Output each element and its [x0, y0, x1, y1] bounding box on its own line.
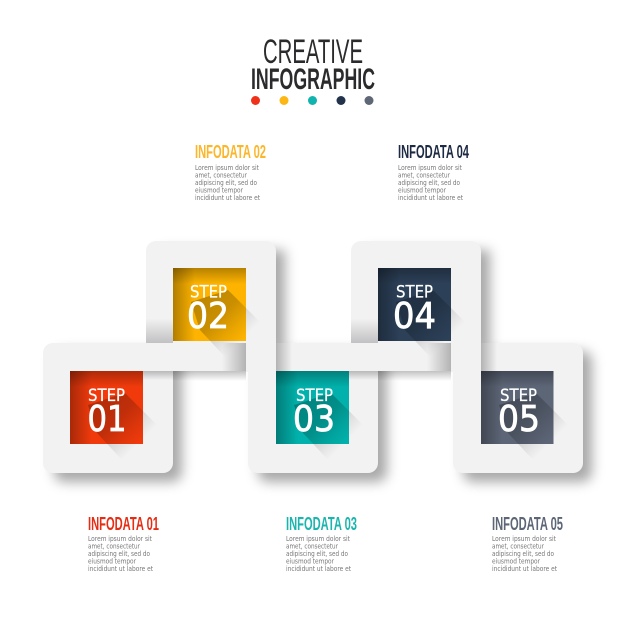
infodata 03 text block	[286, 514, 357, 573]
infodata 05 text block: adipiscing elit, sed do	[492, 550, 554, 558]
infodata 02 text block: adipiscing elit, sed do	[195, 179, 257, 187]
connector bar 1 to 2	[60, 343, 246, 371]
title: INFOGRAPHIC	[251, 63, 375, 96]
infodata 01 text block: adipiscing elit, sed do	[88, 550, 150, 558]
frame: step 05	[453, 343, 583, 473]
infodata 04 text block: eiusmod tempor	[398, 186, 446, 194]
title	[251, 33, 375, 96]
infodata 02 text block: Lorem ipsum dolor sit	[195, 164, 259, 172]
title: CREATIVE	[263, 33, 363, 71]
frame: step 03	[248, 343, 378, 473]
step 01	[70, 371, 158, 462]
infodata 04 text block: INFODATA 04	[398, 142, 469, 162]
infodata 04 text block: adipiscing elit, sed do	[398, 179, 460, 187]
vertical arm 4 to 5	[451, 300, 481, 372]
infodata 02 text block	[195, 142, 266, 202]
infodata 05 text block: INFODATA 05	[492, 514, 563, 534]
infodata 01 text block: incididunt ut labore et	[88, 565, 153, 573]
step 04: STEP	[396, 282, 433, 302]
step 05: STEP	[500, 386, 537, 406]
infodata 04 text block	[398, 142, 469, 202]
infodata 05 text block: incididunt ut labore et	[492, 565, 557, 573]
infodata 03 text block: incididunt ut labore et	[286, 565, 351, 573]
fold shading above bars	[146, 318, 378, 343]
frame: step 04 top	[351, 241, 481, 351]
step 01: STEP	[88, 386, 125, 406]
vertical arm 2 to 3	[246, 300, 276, 372]
step 03: 03	[293, 399, 335, 440]
step 01: 01	[88, 399, 126, 440]
connector bar 4 to 5	[481, 343, 497, 371]
infodata 05 text block: eiusmod tempor	[492, 558, 540, 566]
infodata 04 text block: Lorem ipsum dolor sit	[398, 164, 462, 172]
frame: step 01	[43, 343, 173, 473]
infodata 01 text block: INFODATA 01	[88, 514, 159, 534]
step 04	[378, 268, 466, 359]
infodata 02 text block: INFODATA 02	[195, 142, 266, 162]
infodata 02 text block: incididunt ut labore et	[195, 194, 260, 202]
step 03	[276, 371, 364, 462]
step 05: 05	[498, 399, 540, 440]
step 05	[481, 371, 569, 462]
color dots	[251, 96, 374, 105]
infodata 01 text block: eiusmod tempor	[88, 558, 136, 566]
infodata 01 text block	[88, 514, 159, 573]
infodata 02 text block: eiusmod tempor	[195, 186, 243, 194]
step 04: 04	[393, 296, 436, 337]
step 02	[173, 268, 261, 359]
infodata 05 text block: Lorem ipsum dolor sit	[492, 535, 556, 543]
infodata 05 text block	[492, 514, 563, 573]
infodata 01 text block: amet, consectetur	[88, 542, 140, 550]
infodata 03 text block: INFODATA 03	[286, 514, 357, 534]
infodata 03 text block: amet, consectetur	[286, 542, 338, 550]
infodata 05 text block: amet, consectetur	[492, 542, 544, 550]
infodata 01 text block: Lorem ipsum dolor sit	[88, 535, 152, 543]
step 02: STEP	[190, 282, 227, 302]
infodata 02 text block: amet, consectetur	[195, 172, 247, 180]
step 03: STEP	[296, 386, 333, 406]
frame drop shadows	[54, 250, 592, 482]
infodata 03 text block: adipiscing elit, sed do	[286, 550, 348, 558]
fold shading under bars	[143, 371, 378, 380]
infodata 03 text block: Lorem ipsum dolor sit	[286, 535, 350, 543]
infodata 03 text block: eiusmod tempor	[286, 558, 334, 566]
infodata 04 text block: incididunt ut labore et	[398, 194, 463, 202]
step 02: 02	[187, 296, 229, 337]
infodata 04 text block: amet, consectetur	[398, 172, 450, 180]
connector bar 3 to 4	[276, 343, 451, 371]
frame: step 02 top	[146, 241, 276, 351]
